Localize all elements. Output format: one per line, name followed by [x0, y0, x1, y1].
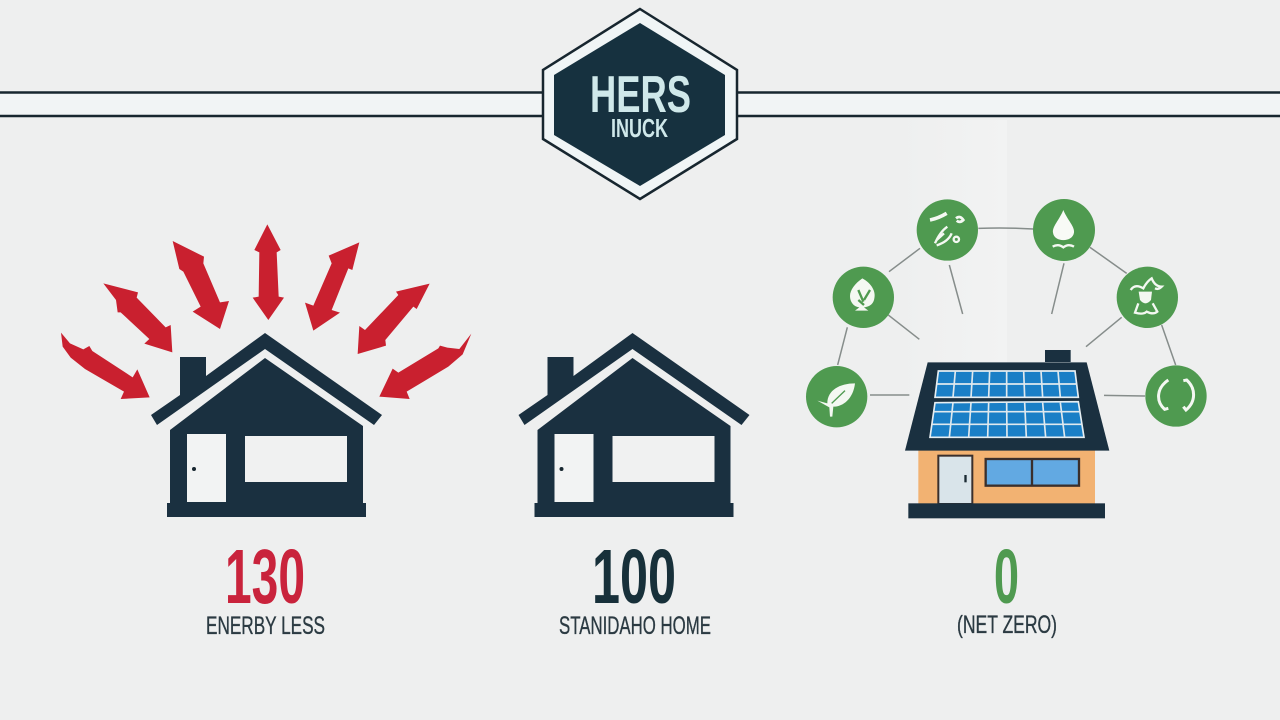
panel: energy loss home [61, 224, 471, 640]
solar panel: upper [935, 371, 1078, 397]
door [938, 456, 972, 504]
panel: standard home [518, 333, 750, 640]
score 100: 100 [592, 534, 676, 620]
icon: leaf badge [833, 267, 894, 328]
solar panel: lower [930, 402, 1084, 437]
icon: dark house [151, 333, 382, 517]
icon: leaf sprout [806, 366, 867, 427]
subtitle text: INUCK [611, 113, 668, 143]
label: STANIDAHO HOME [559, 612, 711, 640]
chimney [1045, 350, 1071, 362]
connector lines [838, 228, 1176, 396]
title text: HERS [590, 66, 691, 124]
foundation [908, 503, 1105, 518]
icon group: green sustainability circles [806, 199, 1207, 427]
icon: cycle arrows [1145, 365, 1207, 427]
label: ENERBY LESS [206, 612, 325, 640]
red arrows radiating around house [61, 224, 471, 399]
label: (NET ZERO) [957, 611, 1057, 639]
roof [905, 362, 1109, 451]
score 130: 130 [225, 534, 305, 620]
window [986, 459, 1079, 486]
walls [918, 450, 1095, 504]
door handle [964, 475, 967, 482]
score 0: 0 [994, 534, 1019, 620]
title badge: HERS index hexagon [543, 9, 737, 199]
icon: plant stems [917, 199, 978, 261]
icon: water drop [1033, 199, 1095, 261]
icon: solar house [905, 350, 1109, 518]
icon: recycling figure [1117, 267, 1178, 328]
icon: dark house [518, 333, 750, 517]
panel: net zero home [806, 199, 1207, 639]
header band [0, 92, 1280, 116]
